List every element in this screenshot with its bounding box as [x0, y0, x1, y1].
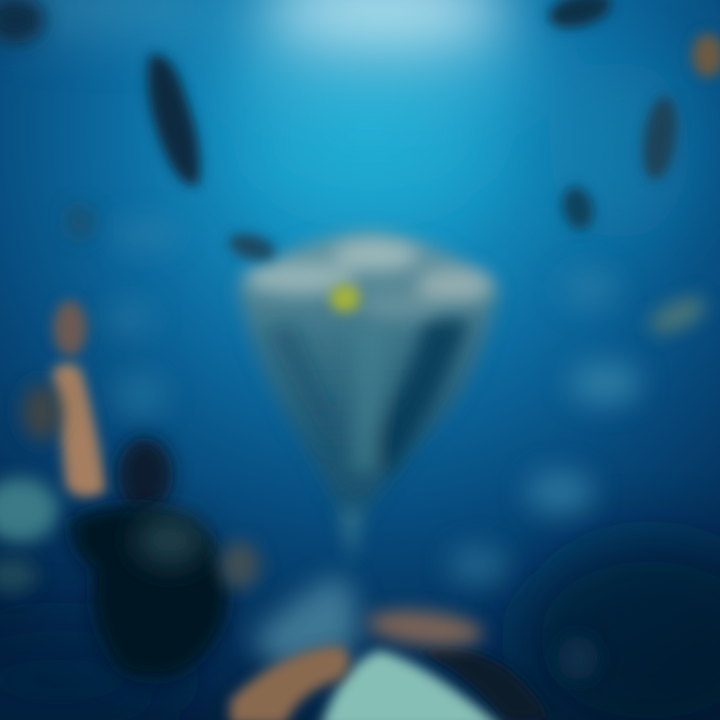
net tail — [338, 510, 364, 565]
yellow tag — [330, 284, 360, 312]
arm — [230, 645, 350, 720]
diver on the left — [0, 300, 260, 678]
swimmer at the bottom — [230, 575, 550, 720]
faint drifting bubbles — [104, 217, 641, 585]
top right debris — [545, 0, 615, 34]
head — [117, 437, 173, 513]
net body — [238, 232, 498, 530]
shoulder — [366, 605, 484, 651]
hand — [53, 300, 87, 356]
lower left shadow — [0, 557, 37, 593]
mid right debris — [558, 183, 598, 233]
pale tank — [0, 478, 58, 542]
large dark leaf — [148, 54, 200, 185]
light from the surface — [0, 0, 690, 240]
funnel-shaped net — [238, 232, 498, 565]
left small debris — [65, 204, 95, 240]
net dark inner folds — [265, 320, 470, 480]
deep water shading — [0, 540, 720, 720]
torso — [70, 505, 229, 678]
raised arm — [52, 363, 106, 497]
shirt — [320, 650, 505, 720]
bottom right debris — [558, 636, 598, 680]
small dark debris — [226, 229, 278, 265]
net pale top edge — [245, 240, 493, 319]
torso highlight — [135, 514, 205, 566]
right debris — [638, 94, 682, 182]
dark sleeve — [415, 648, 550, 720]
forearm — [220, 541, 260, 589]
orange debris — [692, 33, 720, 77]
pale water patch — [250, 575, 358, 670]
top left debris — [0, 0, 45, 44]
pale debris — [645, 290, 711, 340]
shoulder shadow — [22, 384, 62, 440]
